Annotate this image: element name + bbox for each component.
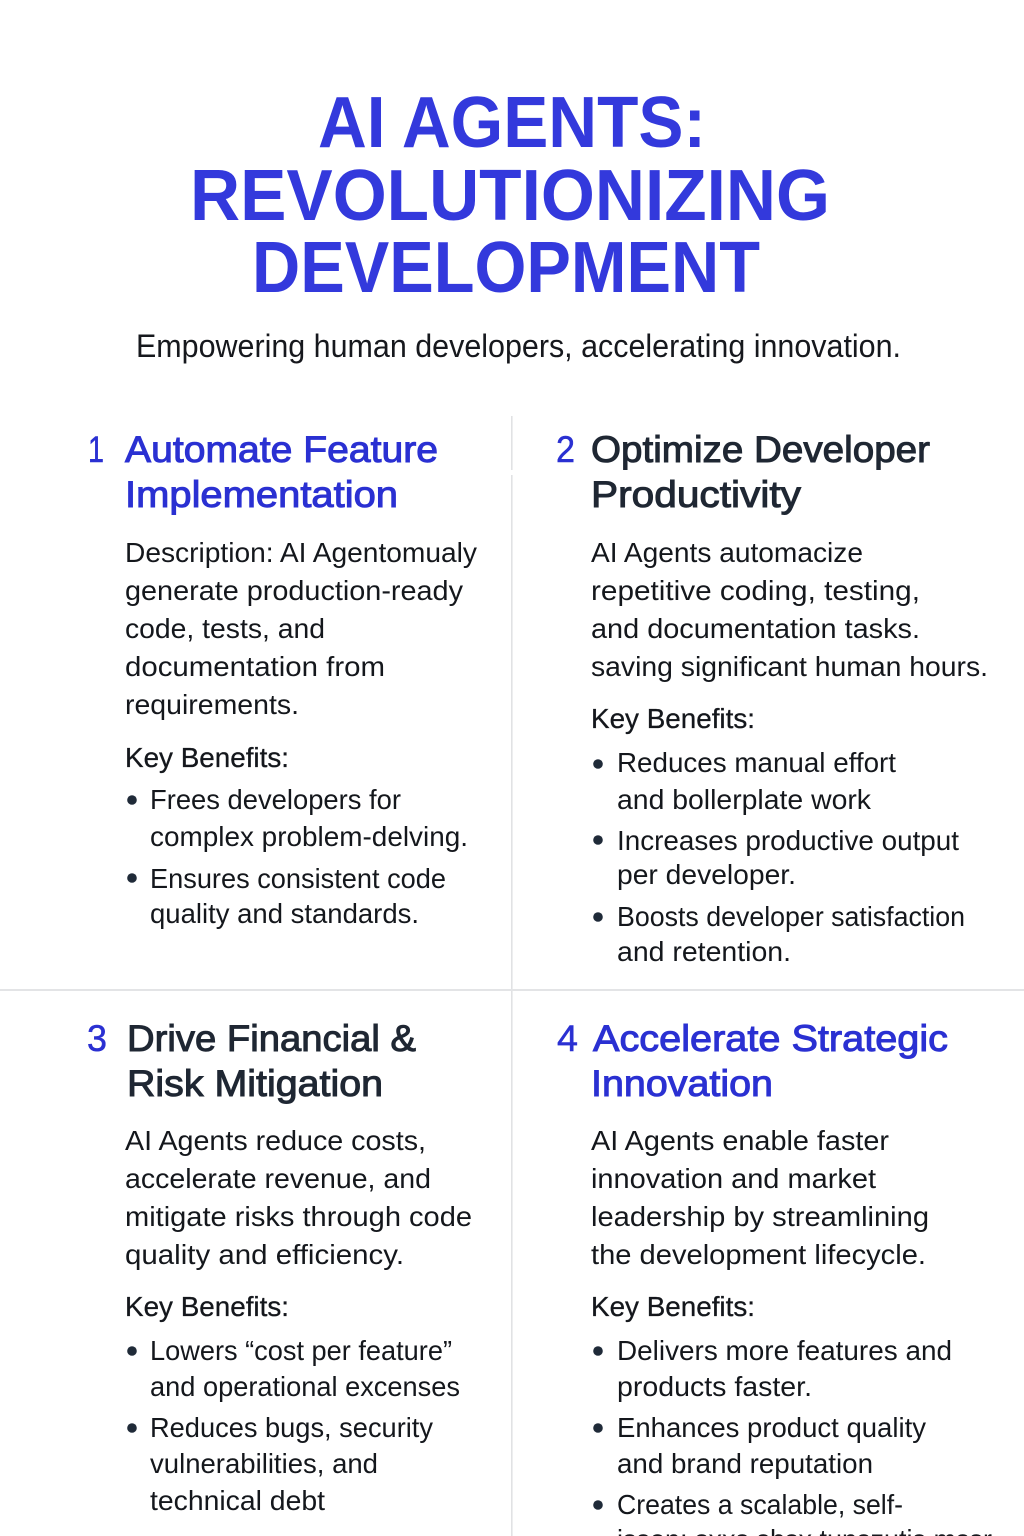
panel 1 benefits list: Ensures consistent code [150, 863, 446, 894]
panel 3 description: mitigate risks through code [125, 1201, 472, 1232]
panel: accelerate strategic innovation [557, 1018, 992, 1536]
panel 3 benefits list: Lowers “cost per feature” [150, 1335, 452, 1366]
panel 3 benefits list: technical debt [150, 1485, 325, 1516]
title: DEVELOPMENT [252, 228, 760, 308]
panel 4 description: leadership by streamlining [591, 1201, 929, 1232]
panel 2 heading: Productivity [591, 474, 802, 515]
panel: automate feature implementation [88, 429, 477, 929]
panel 2 benefits list: and bollerplate work [617, 784, 872, 815]
panel 4 number: 4 [557, 1018, 578, 1059]
panel 4 description [591, 1125, 929, 1270]
title [190, 83, 830, 308]
panel: drive financial and risk mitigation [87, 1018, 472, 1516]
panel 1 heading: Automate Feature [125, 429, 438, 470]
panel 1 benefits list: complex problem-delving. [150, 821, 468, 852]
panel 3 benefits list: and operational excenses [150, 1371, 460, 1402]
panel 2 heading [591, 429, 930, 515]
panel 3 heading [127, 1018, 416, 1104]
panel 3 description [125, 1125, 472, 1270]
panel 2 number: 2 [556, 429, 575, 470]
panel 4 key benefits label: Key Benefits: [591, 1291, 755, 1322]
panel: optimize developer productivity [556, 429, 988, 967]
panel 4 heading: Innovation [591, 1063, 773, 1104]
panel 1 description: code, tests, and [125, 613, 325, 644]
panel 3 number: 3 [87, 1018, 107, 1059]
panel 2 benefits list: Reduces manual effort [617, 747, 896, 778]
panel 1 benefits list: quality and standards. [150, 898, 419, 929]
panel 3 heading: Risk Mitigation [127, 1063, 383, 1104]
subtitle: Empowering human developers, accelerating innovation. [136, 328, 901, 364]
panel 2 benefits list: and retention. [617, 936, 791, 967]
panel 1 heading: Implementation [125, 474, 398, 515]
panel 4 benefits list: Delivers more features and [617, 1335, 952, 1366]
panel 1 heading [125, 429, 438, 515]
panel 4 heading: Accelerate Strategic [593, 1018, 948, 1059]
panel 4 benefits list: Enhances product quality [617, 1412, 926, 1443]
panel 3 key benefits label: Key Benefits: [125, 1291, 289, 1322]
panel 1 description [125, 537, 477, 720]
panel 1 number: 1 [88, 429, 104, 470]
panel 4 benefits list: and brand reputation [617, 1448, 873, 1479]
panel 2 description: repetitive coding, testing, [591, 575, 920, 606]
title: AI AGENTS: [318, 83, 706, 163]
panel 1 description: requirements. [125, 689, 299, 720]
panel 4 description: AI Agents enable faster [591, 1125, 889, 1156]
panel 3 benefits list: Reduces bugs, security [150, 1412, 433, 1443]
panel 3 benefits list [127, 1335, 460, 1516]
panel 2 description [591, 537, 988, 682]
panel 1 key benefits label: Key Benefits: [125, 742, 289, 773]
panel 1 description: Description: AI Agentomualy [125, 537, 477, 568]
panel 2 benefits list: Boosts developer satisfaction [617, 901, 965, 932]
panel 4 description: innovation and market [591, 1163, 876, 1194]
panel 2 description: saving significant human hours. [591, 651, 988, 682]
panel 2 benefits list: per developer. [617, 859, 796, 890]
panel 1 benefits list: Frees developers for [150, 784, 401, 815]
panel 3 description: accelerate revenue, and [125, 1163, 431, 1194]
panel 1 description: generate production-ready [125, 575, 463, 606]
title: REVOLUTIONIZING [190, 156, 830, 236]
panel 4 description: the development lifecycle. [591, 1239, 926, 1270]
panel 3 description: quality and efficiency. [125, 1239, 404, 1270]
panel 2 benefits list: Increases productive output [617, 825, 959, 856]
panel 1 description: documentation from [125, 651, 385, 682]
panel 4 heading [591, 1018, 948, 1104]
panel 4 benefits list [593, 1335, 992, 1536]
panel 3 heading: Drive Financial & [127, 1018, 416, 1059]
panel 2 key benefits label: Key Benefits: [591, 703, 755, 734]
panel 3 description: AI Agents reduce costs, [125, 1125, 426, 1156]
panel 2 benefits list [593, 747, 965, 967]
panel 2 description: AI Agents automacize [591, 537, 863, 568]
panel 1 benefits list [127, 784, 468, 929]
panel 3 benefits list: vulnerabilities, and [150, 1448, 378, 1479]
panel 4 benefits list: Creates a scalable, self- [617, 1489, 903, 1520]
panel 2 description: and documentation tasks. [591, 613, 920, 644]
panel 2 heading: Optimize Developer [591, 429, 930, 470]
panel 4 benefits list: products faster. [617, 1371, 812, 1402]
